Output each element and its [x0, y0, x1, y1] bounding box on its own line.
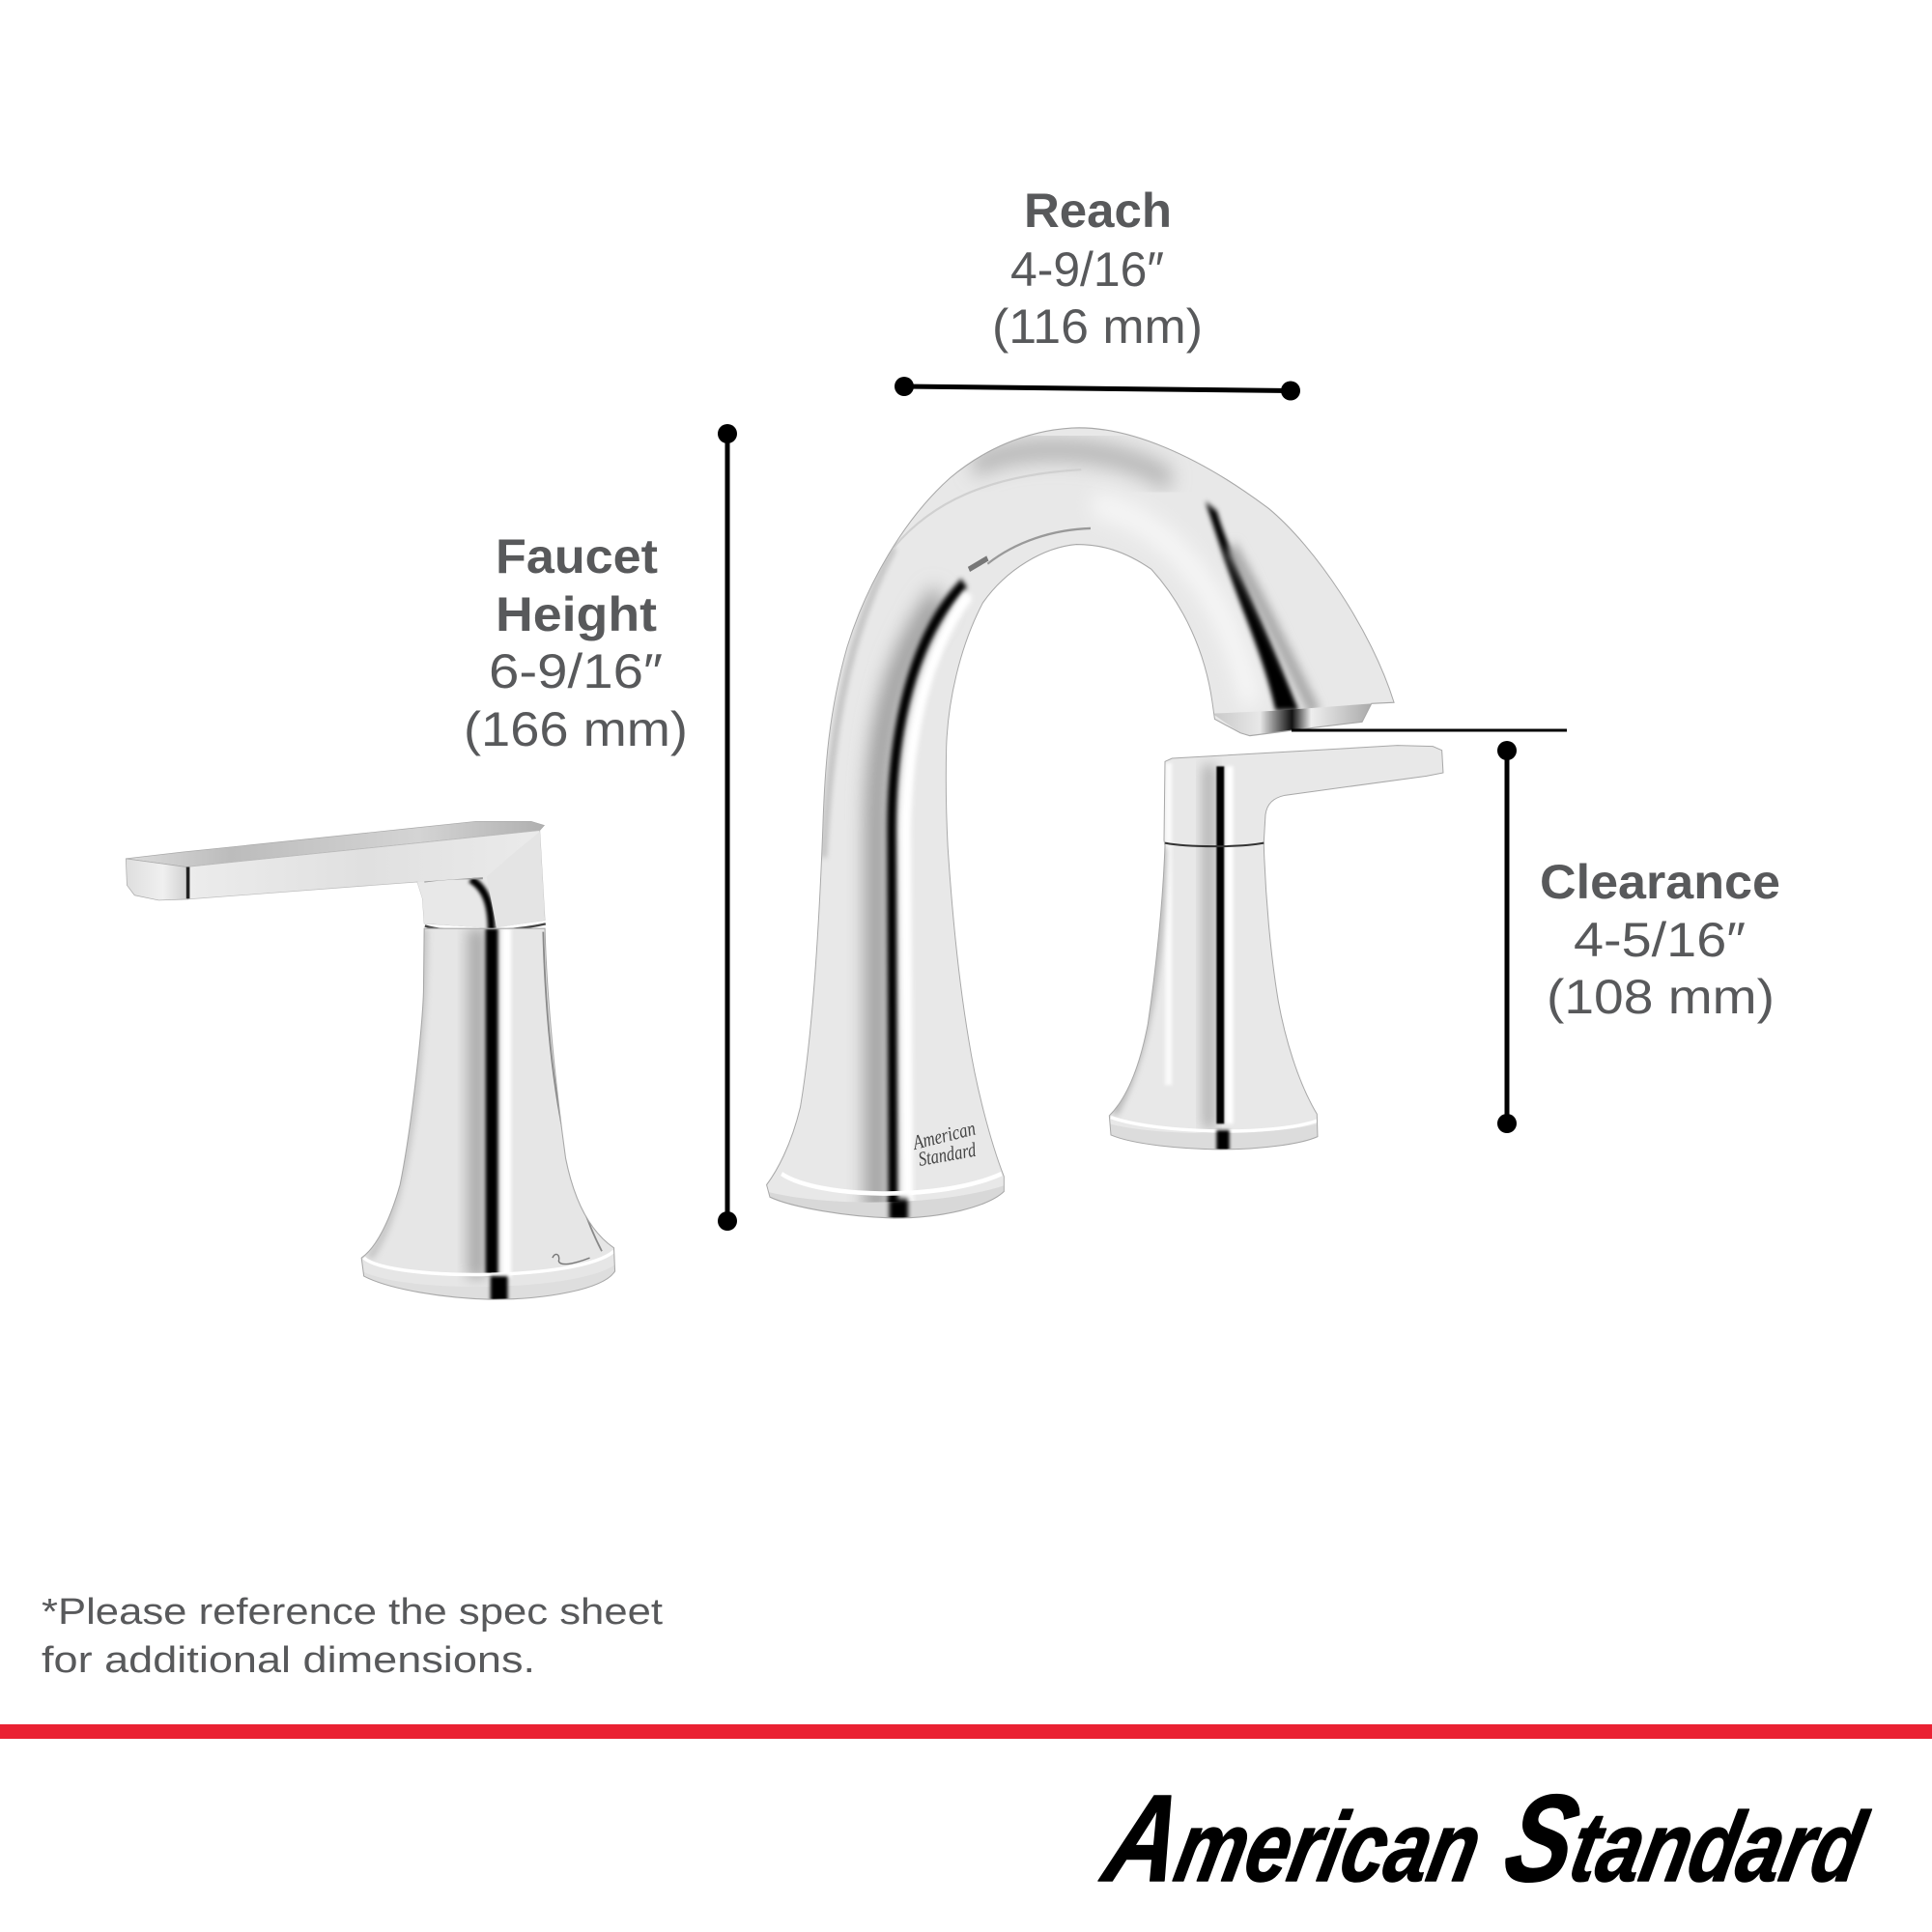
- label: clearance metric: (108 mm): [1547, 970, 1775, 1024]
- dimension: clearance: [1497, 741, 1780, 1133]
- red divider bar: [0, 1724, 1932, 1739]
- reach line: [895, 377, 1300, 400]
- logo word: American: American: [1093, 1769, 1495, 1907]
- spout outline: [767, 428, 1394, 1218]
- lever tip divider: [186, 867, 189, 898]
- lever top face: [126, 821, 544, 867]
- brand mark top line: American: [909, 1117, 978, 1154]
- logo: American Standard: [1093, 1769, 1881, 1907]
- right handle shape: [1104, 741, 1449, 1156]
- handle body: [358, 925, 621, 1304]
- footnote: [42, 1592, 664, 1681]
- clearance reference line: [1292, 728, 1567, 732]
- label: faucet height metric: (166 mm): [464, 702, 688, 756]
- collar gap: [425, 923, 546, 931]
- spout body: [753, 414, 1409, 1235]
- brand mark bottom line: Standard: [917, 1138, 978, 1171]
- faucet: left handle: [126, 821, 621, 1304]
- logo word: Standard: Standard: [1494, 1770, 1881, 1907]
- faucet: right handle: [1104, 741, 1449, 1156]
- spout brand mark: [909, 1117, 978, 1171]
- neck: [417, 831, 545, 932]
- lever front: [186, 831, 545, 928]
- handle hole: [553, 1254, 590, 1264]
- label: faucet height imperial: 6-9/16″: [489, 644, 663, 698]
- faucet height line: [718, 424, 737, 1231]
- lever tip: [126, 859, 188, 900]
- label: faucet height heading second line: Height: [496, 587, 657, 641]
- label: faucet height heading: Faucet: [496, 529, 658, 583]
- clearance line: [1497, 741, 1517, 1133]
- label: reach metric: (116 mm): [992, 299, 1203, 354]
- collar gap: [1165, 843, 1264, 846]
- label: clearance imperial: 4-5/16″: [1574, 913, 1746, 967]
- dimension: faucet height: [464, 424, 737, 1231]
- footnote line one: *Please reference the spec sheet: [42, 1592, 664, 1633]
- faucet: spout: [753, 414, 1409, 1235]
- dimension: reach: [895, 184, 1300, 400]
- label: reach heading: Reach: [1024, 184, 1172, 238]
- label: reach imperial: 4-9/16″: [1010, 242, 1164, 297]
- label: clearance heading: Clearance: [1540, 855, 1780, 909]
- right handle outline: [1109, 746, 1443, 1150]
- footnote line two: for additional dimensions.: [42, 1640, 535, 1681]
- handle body outline: [361, 928, 615, 1299]
